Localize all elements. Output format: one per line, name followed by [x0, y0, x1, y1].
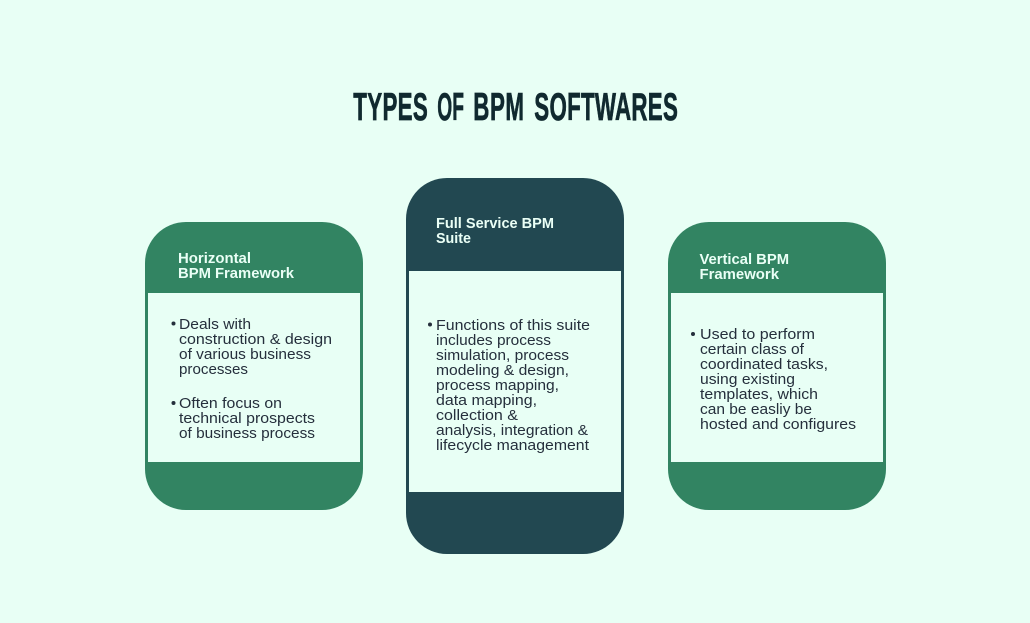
heading: Full Service BPM [436, 216, 554, 232]
bullet list [428, 318, 590, 454]
panel: Horizontal BPM Framework [145, 222, 363, 510]
heading: Framework [700, 267, 780, 283]
bullet list [172, 317, 332, 442]
title: SOFTWARES [534, 86, 678, 129]
bullet list: using existing [700, 372, 795, 388]
heading [436, 216, 554, 247]
heading [178, 251, 295, 282]
bullet list: technical prospects [179, 411, 315, 427]
bullet list: includes process [436, 333, 551, 349]
bullet list: data mapping, [436, 393, 537, 409]
card background [406, 178, 624, 554]
bullet list: templates, which [700, 387, 818, 403]
bullet list: simulation, process [436, 348, 569, 364]
bullet list: Deals with [179, 317, 251, 333]
heading: Horizontal [178, 251, 251, 267]
heading: BPM Framework [178, 266, 295, 282]
bullet list: of business process [179, 426, 315, 442]
panel: Full Service BPM Suite [406, 178, 624, 554]
card background [145, 222, 363, 510]
bullet list: hosted and configures [700, 417, 856, 433]
bullet list: can be easliy be [700, 402, 812, 418]
bullet list: analysis, integration & [436, 423, 588, 439]
bullet list: Used to perform [700, 327, 815, 343]
card body [671, 293, 883, 462]
title: BPM [473, 86, 524, 129]
heading: Vertical BPM [700, 252, 789, 268]
title: TYPES [353, 86, 428, 129]
bullet list: Often focus on [179, 396, 282, 412]
heading: Suite [436, 231, 471, 247]
bullet list: lifecycle management [436, 438, 589, 454]
bullet list: collection & [436, 408, 518, 424]
card body [409, 271, 621, 492]
card body [148, 293, 360, 462]
title: OF [437, 86, 464, 129]
bullet list: certain class of [700, 342, 805, 358]
panel: Vertical BPM Framework [668, 222, 886, 510]
heading [700, 252, 789, 283]
bullet list: of various business [179, 347, 311, 363]
bullet list: process mapping, [436, 378, 559, 394]
bullet list: Functions of this suite [436, 318, 590, 334]
card background [668, 222, 886, 510]
bullet list: modeling & design, [436, 363, 569, 379]
bullet list: construction & design [179, 332, 332, 348]
bullet list: processes [179, 362, 248, 378]
title [353, 86, 678, 129]
bullet list: coordinated tasks, [700, 357, 828, 373]
bullet list [691, 327, 856, 433]
